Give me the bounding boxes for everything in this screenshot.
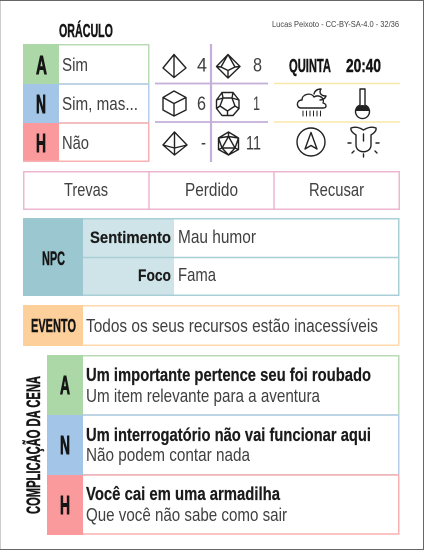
row A: Um importante pertence seu foi roubado [86, 365, 371, 385]
panel: NPC: Fama [178, 265, 217, 285]
row A: A [60, 370, 70, 400]
panel: oracle table: Sim, mas... [62, 94, 138, 114]
icon: d6 [163, 91, 186, 116]
title: ORÁCULO [59, 20, 113, 41]
vertical heading: COMPLICAÇÃO DA CENA [22, 376, 45, 514]
panel: oracle table: N [36, 89, 46, 119]
time: 20:40 [346, 55, 381, 76]
panel: three options row: Perdido [185, 180, 238, 200]
icon: d12 [216, 92, 239, 116]
row H: Você cai em uma armadilha [86, 484, 281, 504]
credit line: Lucas Peixoto - CC-BY-SA-4.0 - 32/36 [272, 20, 400, 29]
panel: day, time and conditions [274, 55, 400, 157]
row N: N [60, 430, 70, 460]
dice values: 11 [246, 134, 261, 154]
panel: oracle table: Sim [62, 55, 88, 75]
icon: rainy night cloud [297, 89, 326, 116]
day: QUINTA [289, 55, 331, 76]
panel: three options row: Recusar [309, 180, 364, 200]
icon: d8 [216, 54, 240, 78]
panel: complicação da cena [22, 355, 399, 535]
icon: d10 [163, 132, 187, 155]
panel: NPC: NPC [42, 248, 65, 270]
icon: d4 [163, 54, 186, 78]
icon: thermometer [356, 89, 370, 119]
panel: NPC: Mau humor [178, 227, 256, 247]
row A [47, 355, 399, 415]
panel: dice grid [155, 44, 268, 162]
panel: oracle table: A [36, 50, 47, 80]
dice values: 8 [253, 56, 262, 76]
panel: NPC: Foco [138, 266, 171, 285]
row N: Não podem contar nada [86, 445, 251, 465]
panel: oracle table: H [36, 128, 46, 158]
panel: three options row: Trevas [64, 180, 108, 200]
dice values: 6 [197, 94, 206, 115]
dice values: - [201, 133, 206, 154]
dice values [197, 56, 262, 154]
row H [47, 475, 399, 535]
icon: tongue [348, 127, 379, 157]
panel: oracle table [23, 44, 149, 162]
panel: oracle table: Não [62, 133, 89, 153]
row H: Que você não sabe como sair [86, 505, 287, 525]
icon: d20 [218, 132, 238, 155]
panel: NPC: Sentimento [90, 228, 171, 247]
panel: evento: EVENTO [31, 315, 76, 336]
row N [47, 415, 399, 475]
dice values: 1 [253, 94, 260, 115]
panel: evento [23, 305, 399, 346]
row N: Um interrogatório não vai funcionar aqui [86, 425, 371, 445]
panel: three options row [24, 171, 399, 209]
icon: compass [297, 128, 325, 156]
row H: H [60, 490, 70, 520]
row A: Um item relevante para a aventura [86, 386, 321, 406]
panel: NPC [23, 218, 400, 296]
dice values: 4 [197, 56, 207, 76]
